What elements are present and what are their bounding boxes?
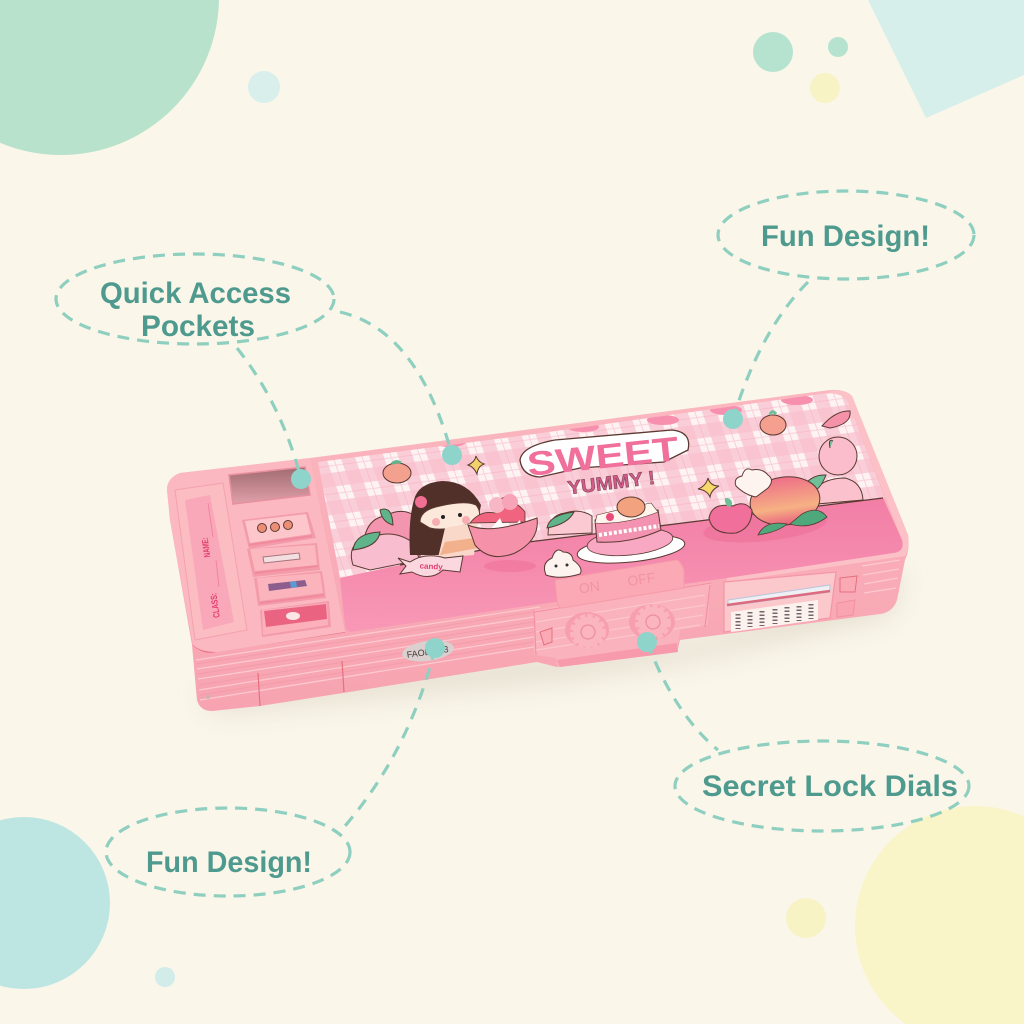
peach shadow — [702, 507, 828, 547]
product shadow — [200, 570, 905, 712]
decorative shapes: top right — [753, 0, 1024, 118]
apple — [709, 504, 752, 533]
lock assembly — [534, 560, 711, 667]
candy wrapper — [398, 556, 463, 577]
cake and bunny — [544, 497, 686, 577]
callout text: Fun Design! — [761, 220, 930, 253]
lid artwork left: girl with peaches — [351, 456, 537, 577]
bottom tab — [557, 643, 678, 667]
front ribs — [196, 560, 900, 700]
right raised lip — [727, 391, 909, 582]
girl — [410, 481, 481, 558]
anchor dots — [291, 445, 462, 489]
bunny — [735, 469, 772, 497]
mirror window — [229, 467, 310, 504]
SWEET YUMMY logo: YUMMY ! — [566, 468, 656, 499]
class label: CLASS: — [208, 592, 222, 618]
front seams — [193, 632, 345, 706]
bowl with dessert — [468, 494, 537, 572]
back peaches — [351, 462, 420, 570]
main peach — [747, 472, 823, 530]
candy wrapper: candy — [419, 561, 443, 572]
decorative shapes: bottom left — [0, 817, 175, 989]
callout text: Pockets — [141, 310, 255, 343]
left control panel — [167, 458, 345, 652]
label badge — [401, 637, 455, 665]
lid artwork right: peaches and bunny — [698, 411, 863, 547]
dashed bubble — [56, 254, 334, 344]
callout: secret lock dials — [637, 632, 969, 831]
SWEET YUMMY logo — [520, 430, 689, 499]
top peach — [760, 415, 786, 435]
callout text: Secret Lock Dials — [702, 770, 958, 803]
on off labels: OFF — [626, 569, 656, 589]
decorative shapes: bottom right — [786, 806, 1024, 1024]
decorative shapes: top left — [0, 0, 280, 155]
name label: NAME: — [200, 537, 212, 558]
left dial — [565, 612, 609, 648]
peach leaves — [758, 510, 827, 535]
case body — [167, 390, 909, 711]
SWEET YUMMY logo: SWEET — [525, 430, 681, 484]
callout text: Fun Design! — [146, 846, 312, 879]
quick access buttons — [242, 512, 331, 637]
label badge: FAOBA #3 — [406, 644, 449, 660]
lid top: gingham — [318, 393, 885, 578]
on off labels: ON — [578, 578, 601, 596]
pencil case product — [167, 390, 909, 711]
callout: quick access pockets — [56, 254, 462, 489]
callout: fun design bottom — [106, 638, 445, 896]
lid bottom: solid pink — [340, 498, 903, 632]
on off labels — [578, 569, 656, 596]
on off slider — [555, 560, 684, 608]
callout text — [100, 277, 291, 343]
connector lines — [237, 348, 301, 479]
callout: fun design top — [718, 191, 974, 429]
outline peach — [819, 437, 857, 475]
star — [468, 456, 484, 474]
left slider knob — [540, 628, 552, 645]
back peach — [805, 478, 863, 505]
right dial — [629, 604, 675, 640]
star yellow — [698, 478, 719, 497]
lock base — [534, 582, 710, 667]
callout text: Quick Access — [100, 277, 291, 310]
calendar window — [724, 572, 857, 632]
leaf — [822, 411, 850, 428]
